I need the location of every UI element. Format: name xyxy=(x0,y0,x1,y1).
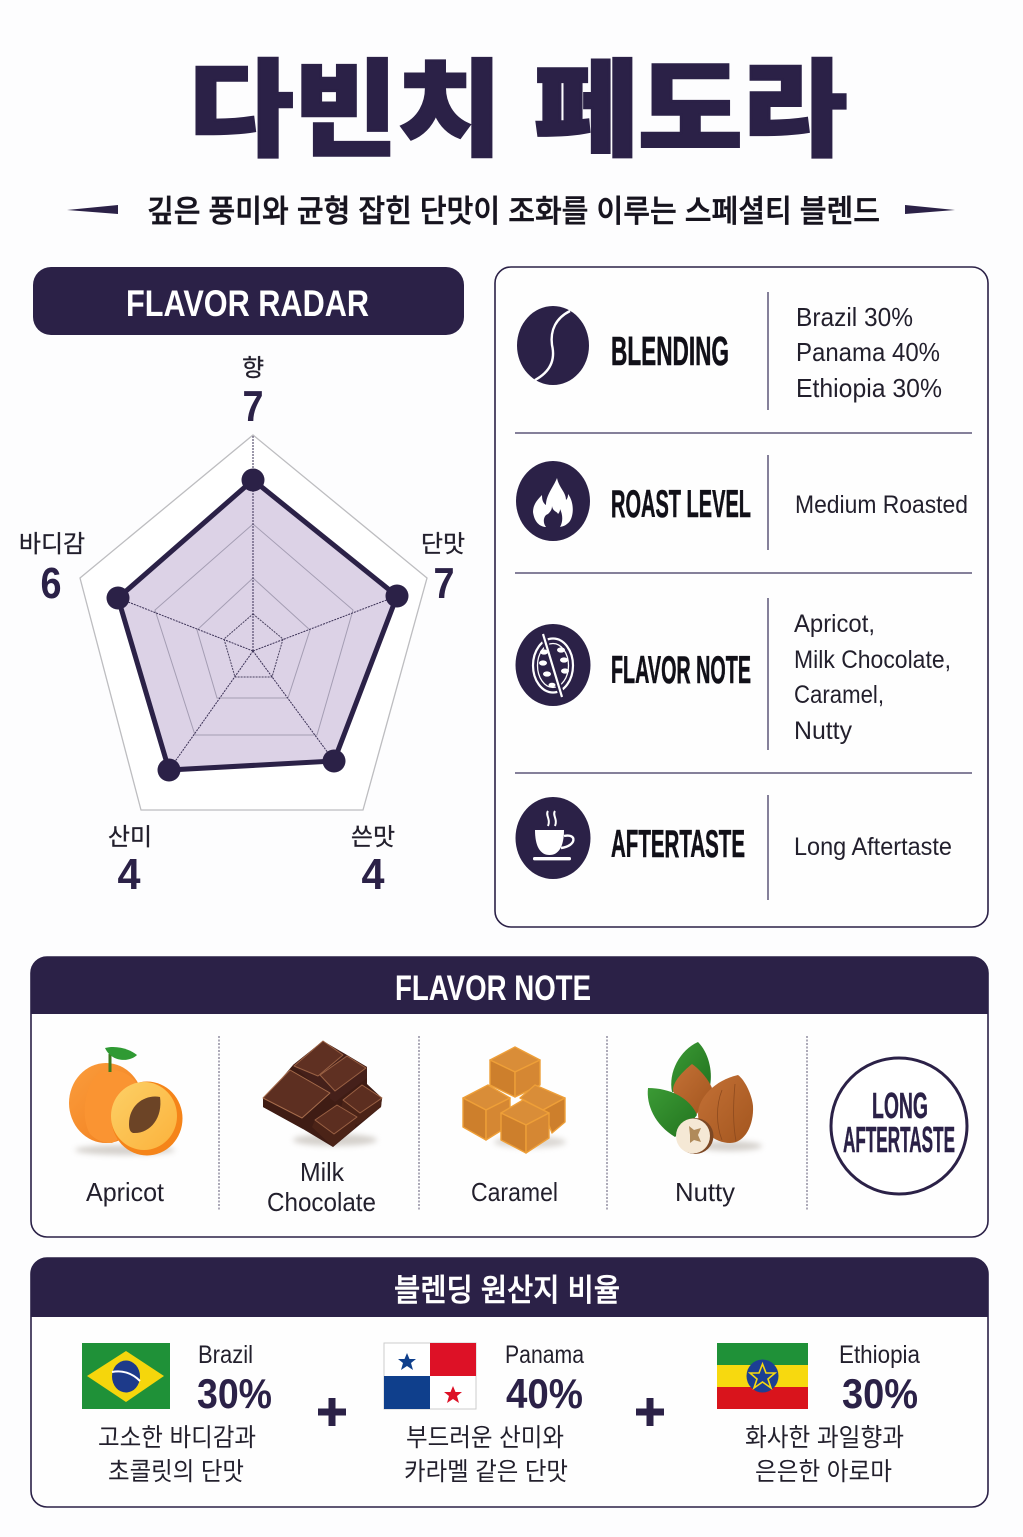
radar label: aroma: 향 xyxy=(242,355,264,382)
origin: brazil xyxy=(98,1341,272,1486)
value: flavor note: Apricot, xyxy=(794,610,875,638)
badge: long aftertaste xyxy=(831,1058,967,1194)
value: blending: Brazil 30% xyxy=(796,302,913,332)
icon: coffee bean xyxy=(517,306,589,385)
origin: panama: 카라멜 같은 단맛 xyxy=(404,1458,568,1486)
radar label: acidity xyxy=(108,824,152,899)
left piece xyxy=(263,1070,330,1129)
value: roast level: Medium Roasted xyxy=(795,491,968,519)
heading: flavor radar xyxy=(33,267,464,335)
value: flavor note: Caramel, xyxy=(794,681,884,709)
heading: flavor note xyxy=(31,957,988,1014)
label: flavor note: FLAVOR NOTE xyxy=(611,649,751,692)
heading: flavor note: FLAVOR NOTE xyxy=(395,969,591,1008)
badge: long aftertaste: LONG xyxy=(872,1085,928,1126)
value: blending: Ethiopia 30% xyxy=(796,373,942,403)
label: roast level: ROAST LEVEL xyxy=(611,483,751,526)
label: caramel: Caramel xyxy=(471,1177,558,1207)
radar chart xyxy=(80,435,427,810)
flag: panama xyxy=(384,1343,476,1409)
upper pieces xyxy=(293,1041,367,1102)
icon: cocoa pod xyxy=(516,624,590,706)
origin: panama: Panama xyxy=(505,1341,584,1369)
origin: ethiopia xyxy=(745,1341,920,1486)
radar label: acidity: 산미 xyxy=(108,824,152,851)
radar label: bitterness xyxy=(351,824,395,899)
icon: nuts xyxy=(648,1042,762,1154)
label: aftertaste: AFTERTASTE xyxy=(611,823,745,866)
origin: brazil: 30% xyxy=(197,1370,272,1417)
origin: ethiopia: 화사한 과일향과 xyxy=(745,1424,904,1452)
panel: flavor note xyxy=(31,957,988,1237)
origin: brazil: 고소한 바디감과 xyxy=(98,1424,256,1452)
value: blending: Panama 40% xyxy=(796,337,940,367)
title: 다빈치 페도라 xyxy=(189,53,847,170)
value: flavor note: Nutty xyxy=(794,717,852,745)
label: apricot: Apricot xyxy=(86,1177,165,1207)
value: blending xyxy=(796,302,942,403)
icon: plus xyxy=(318,1398,346,1426)
radar label: body: 바디감 xyxy=(19,531,85,558)
origin: panama: 부드러운 산미와 xyxy=(406,1424,564,1452)
radar label: sweetness: 단맛 xyxy=(421,531,465,558)
icon: flame xyxy=(516,461,590,541)
radar label: sweetness xyxy=(421,531,465,608)
value: flavor note xyxy=(794,610,951,745)
origin: panama: 40% xyxy=(506,1370,583,1417)
radar label: body: 6 xyxy=(40,559,62,608)
label: milk chocolate: Chocolate xyxy=(267,1187,376,1217)
radar label: aroma: 7 xyxy=(242,382,264,431)
heading: origin ratio: 블렌딩 원산지 비율 xyxy=(394,1273,620,1308)
radar label: bitterness: 4 xyxy=(362,850,385,899)
value: flavor note: Milk Chocolate, xyxy=(794,646,951,674)
value: aftertaste: Long Aftertaste xyxy=(794,833,952,861)
radar label: aroma xyxy=(242,355,264,431)
origin: ethiopia: 은은한 아로마 xyxy=(755,1458,892,1486)
origin: brazil: 초콜릿의 단맛 xyxy=(108,1458,244,1486)
radar label: acidity: 4 xyxy=(118,850,141,899)
label: nutty: Nutty xyxy=(675,1177,735,1207)
origin: panama xyxy=(404,1341,584,1486)
radar label: sweetness: 7 xyxy=(434,559,454,608)
lower middle piece xyxy=(312,1105,357,1147)
origin: ethiopia: 30% xyxy=(842,1370,918,1417)
label: blending: BLENDING xyxy=(611,328,729,374)
radar label: bitterness: 쓴맛 xyxy=(351,824,395,851)
heading: flavor radar: FLAVOR RADAR xyxy=(126,283,369,324)
radar label: body xyxy=(19,531,85,608)
heading: origin ratio xyxy=(31,1258,988,1317)
panel: coffee info xyxy=(495,267,988,927)
subtitle: 깊은 풍미와 균형 잡힌 단맛이 조화를 이루는 스페셜티 블렌드 xyxy=(147,194,880,229)
flag: brazil xyxy=(82,1343,170,1409)
lower right piece xyxy=(340,1085,382,1125)
panel: origin ratio xyxy=(31,1258,988,1507)
icon: milk chocolate xyxy=(263,1041,382,1147)
icon: coffee cup xyxy=(516,797,590,879)
label: milk chocolate: Milk xyxy=(300,1157,345,1187)
icon: apricot xyxy=(69,1047,182,1156)
origin: ethiopia: Ethiopia xyxy=(839,1341,920,1369)
icon: caramel xyxy=(463,1047,566,1153)
icon: plus xyxy=(636,1398,664,1426)
panel: flavor radar xyxy=(19,267,465,899)
flag: ethiopia xyxy=(717,1343,808,1409)
label: milk chocolate xyxy=(267,1157,376,1217)
origin: brazil: Brazil xyxy=(198,1341,253,1369)
